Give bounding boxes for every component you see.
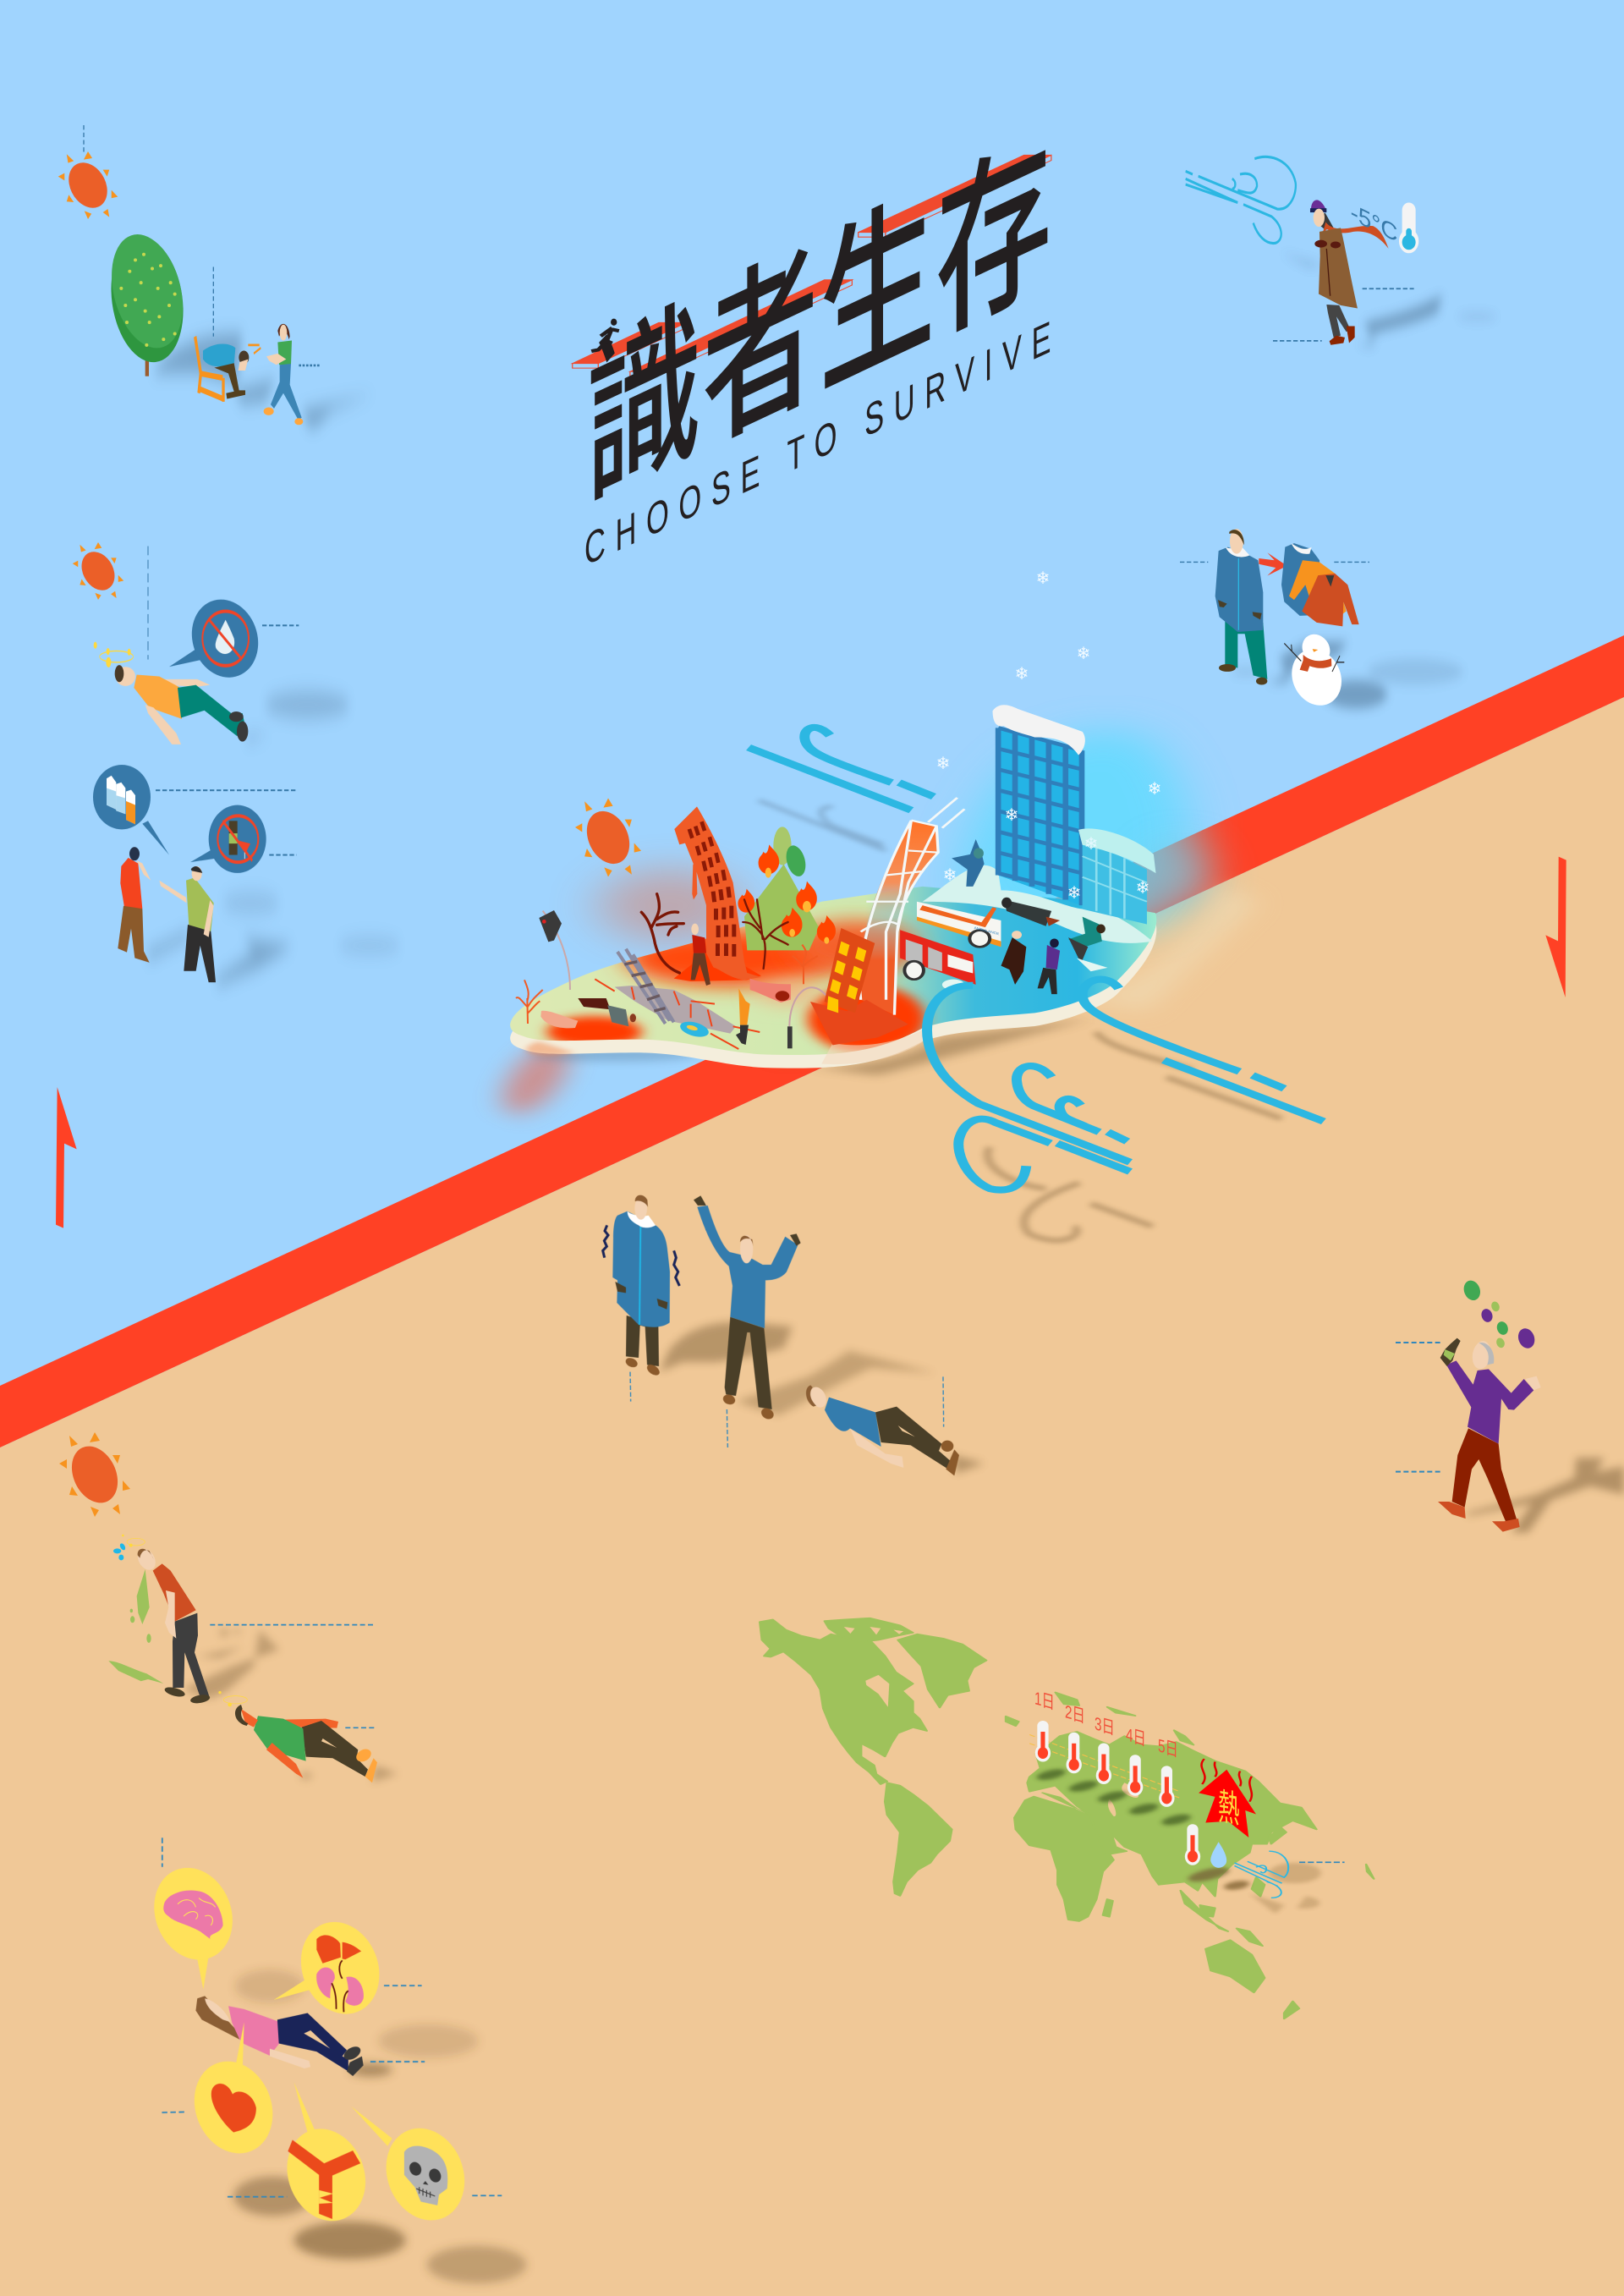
dashed leaders: [630, 1372, 944, 1447]
vomiting man: [113, 1535, 211, 1705]
scene: sun top left: [58, 151, 118, 219]
snowflakes: ❄: [1148, 780, 1161, 799]
vomit pool: [108, 1661, 163, 1684]
thermometers: [1035, 1721, 1200, 1865]
snow mounds: [923, 865, 1153, 943]
bubble: skull: [351, 2106, 478, 2233]
ambulance: [917, 902, 1001, 947]
wind: upper: [749, 728, 934, 810]
island hot side details: [516, 806, 836, 1049]
scene: vomiting man and collapsed man: [108, 1535, 398, 1782]
heat label: 熱: [1218, 1786, 1239, 1831]
lying woman: [195, 1996, 364, 2076]
snowflakes: [936, 569, 1161, 903]
scene: man sick under tree: [84, 125, 375, 427]
background ground: [0, 697, 1624, 2296]
slipping person: [1068, 917, 1107, 971]
collapsed man green shirt: [218, 1691, 377, 1782]
thermometer shadows: [1034, 1767, 1251, 1892]
shadows: [233, 1969, 526, 2283]
map day labels: 2日: [1065, 1701, 1085, 1727]
dashed leaders: [162, 1837, 502, 2197]
shadows: [146, 690, 400, 986]
fallen person on snow: [1001, 898, 1060, 926]
woman in red: [691, 924, 710, 986]
title slabs: [573, 155, 1051, 376]
title: 識者生存: [585, 113, 1052, 530]
sun above island: [575, 799, 641, 876]
wind shadow: above island: [759, 800, 886, 850]
pond with fish: [678, 1019, 710, 1040]
dashed leaders: [84, 125, 320, 365]
bubble: bone fracture: [274, 2082, 379, 2233]
cracked ground: [595, 979, 760, 1049]
shadows: [152, 333, 375, 427]
scene: juggling drunk man: [1396, 1278, 1624, 1533]
people in winter clothes: [1001, 931, 1060, 994]
dashed leaders: [148, 547, 299, 855]
scene: man with layers and snowman: [1180, 529, 1463, 715]
snowflakes: ❄: [1084, 835, 1098, 854]
bubble: heart: [181, 2022, 286, 2166]
arrow: down on ground side: [1545, 857, 1566, 997]
wind shadow: lower: [988, 1032, 1281, 1240]
dashed leaders: [1273, 288, 1414, 341]
shadows: [660, 1322, 984, 1474]
snowflakes: ❄: [1005, 806, 1018, 825]
glow: heat and cold around the island: [489, 731, 1259, 1120]
fallen person: [578, 998, 636, 1026]
ambulance: AMBULANCE: [974, 926, 999, 936]
water drop: [1210, 1842, 1226, 1868]
snowflakes: ❄: [1077, 645, 1090, 663]
glass tower: [993, 705, 1085, 905]
fruit juggling: [1461, 1278, 1538, 1350]
person in blue scarf on snow: [952, 839, 985, 887]
lamp post: [787, 987, 826, 1048]
man fallen: [806, 1384, 959, 1475]
woman in coat: [1310, 200, 1389, 345]
ladder: [617, 949, 674, 1024]
walking woman: [264, 324, 303, 425]
shadows: [184, 1629, 398, 1782]
shadow: [1466, 1458, 1624, 1533]
map day labels: 1日: [1034, 1688, 1055, 1713]
bubble: no water: [169, 593, 260, 684]
man with bottle: [1438, 1338, 1541, 1532]
orange chair: [195, 337, 223, 402]
burnt trees: [641, 894, 788, 973]
map day labels: [1034, 1688, 1178, 1760]
pile of clothes: [1281, 543, 1359, 626]
cow: [750, 979, 791, 1002]
tree: [101, 212, 194, 385]
small orange trees: [516, 945, 818, 1024]
scene: organ damage diagram: [140, 1837, 526, 2283]
red arrow: [1259, 552, 1287, 576]
bubble: liver and kidneys: [274, 1910, 392, 2026]
man waving: [694, 1195, 801, 1421]
map day labels: 4日: [1126, 1724, 1146, 1749]
low glass building: [1078, 828, 1156, 925]
snowflakes: ❄: [1036, 569, 1050, 588]
dashed leader: [1299, 1860, 1345, 1865]
man in blue coat: [1215, 529, 1267, 685]
bubble: milk cartons: [93, 765, 169, 855]
island middle and cold side: [810, 705, 1156, 1045]
scene: cold woman with wind: [1186, 157, 1497, 347]
person in orange: [736, 988, 750, 1045]
scene: sun second: [73, 542, 123, 600]
wind streaks over the island: [749, 728, 1324, 1240]
melting building: [674, 806, 761, 981]
map day labels: 3日: [1095, 1713, 1115, 1738]
scene: three men in cold: [603, 1195, 984, 1475]
man green shirt: [159, 866, 216, 982]
dashed leaders: [210, 1625, 375, 1727]
lying man orange shirt: [94, 642, 248, 744]
world map: [760, 1618, 1374, 2019]
yellow window building: [810, 928, 908, 1045]
scene: sun lower left: [59, 1432, 130, 1517]
red heat arrow: [1199, 1770, 1256, 1837]
snowflakes: ❄: [943, 866, 957, 885]
cold-wave lines: [1029, 1734, 1180, 1798]
shadow: [1280, 252, 1497, 347]
bubble: no alcohol: [190, 805, 266, 873]
snowflakes: ❄: [1015, 665, 1029, 684]
map water bodies: [844, 1627, 1138, 1816]
dashed leaders: [1396, 1343, 1441, 1472]
man in blue parka: [603, 1195, 679, 1377]
subtitle: CHOOSE TO SURVIVE: [584, 310, 1051, 575]
seated man: [203, 344, 261, 398]
icon: running figure: [591, 319, 619, 353]
shadows: [1232, 641, 1463, 709]
map day labels: 5日: [1158, 1735, 1178, 1760]
heat waves: [1201, 1759, 1252, 1802]
continents: [760, 1618, 1374, 2019]
gherkin tower: [859, 798, 964, 1015]
snowflakes: ❄: [936, 755, 950, 773]
flames: [738, 844, 836, 944]
small wind icon: [1234, 1851, 1288, 1898]
bubble: brain: [140, 1856, 246, 1989]
scene: dehydrated people: [93, 547, 400, 986]
snowman: [1284, 630, 1347, 715]
traffic light: [539, 910, 570, 990]
arrow: up on sky side: [56, 1087, 77, 1228]
pig: [540, 1011, 578, 1028]
fire truck: [900, 930, 976, 990]
snowflakes: ❄: [1136, 879, 1149, 898]
wind: lower left big curl: [927, 986, 1130, 1190]
temperature label: -5°C: [1351, 198, 1397, 248]
dashed leaders: [1180, 561, 1369, 563]
red diagonal band: [0, 635, 1624, 1447]
man red shirt: [118, 847, 151, 963]
panel: island platform: [510, 887, 1156, 1068]
mountain with tree: [744, 827, 819, 950]
wind: lower right: [1083, 980, 1324, 1122]
thermometer: [1399, 202, 1418, 253]
snowflakes: ❄: [1067, 884, 1081, 903]
wind icon: [1186, 157, 1296, 244]
